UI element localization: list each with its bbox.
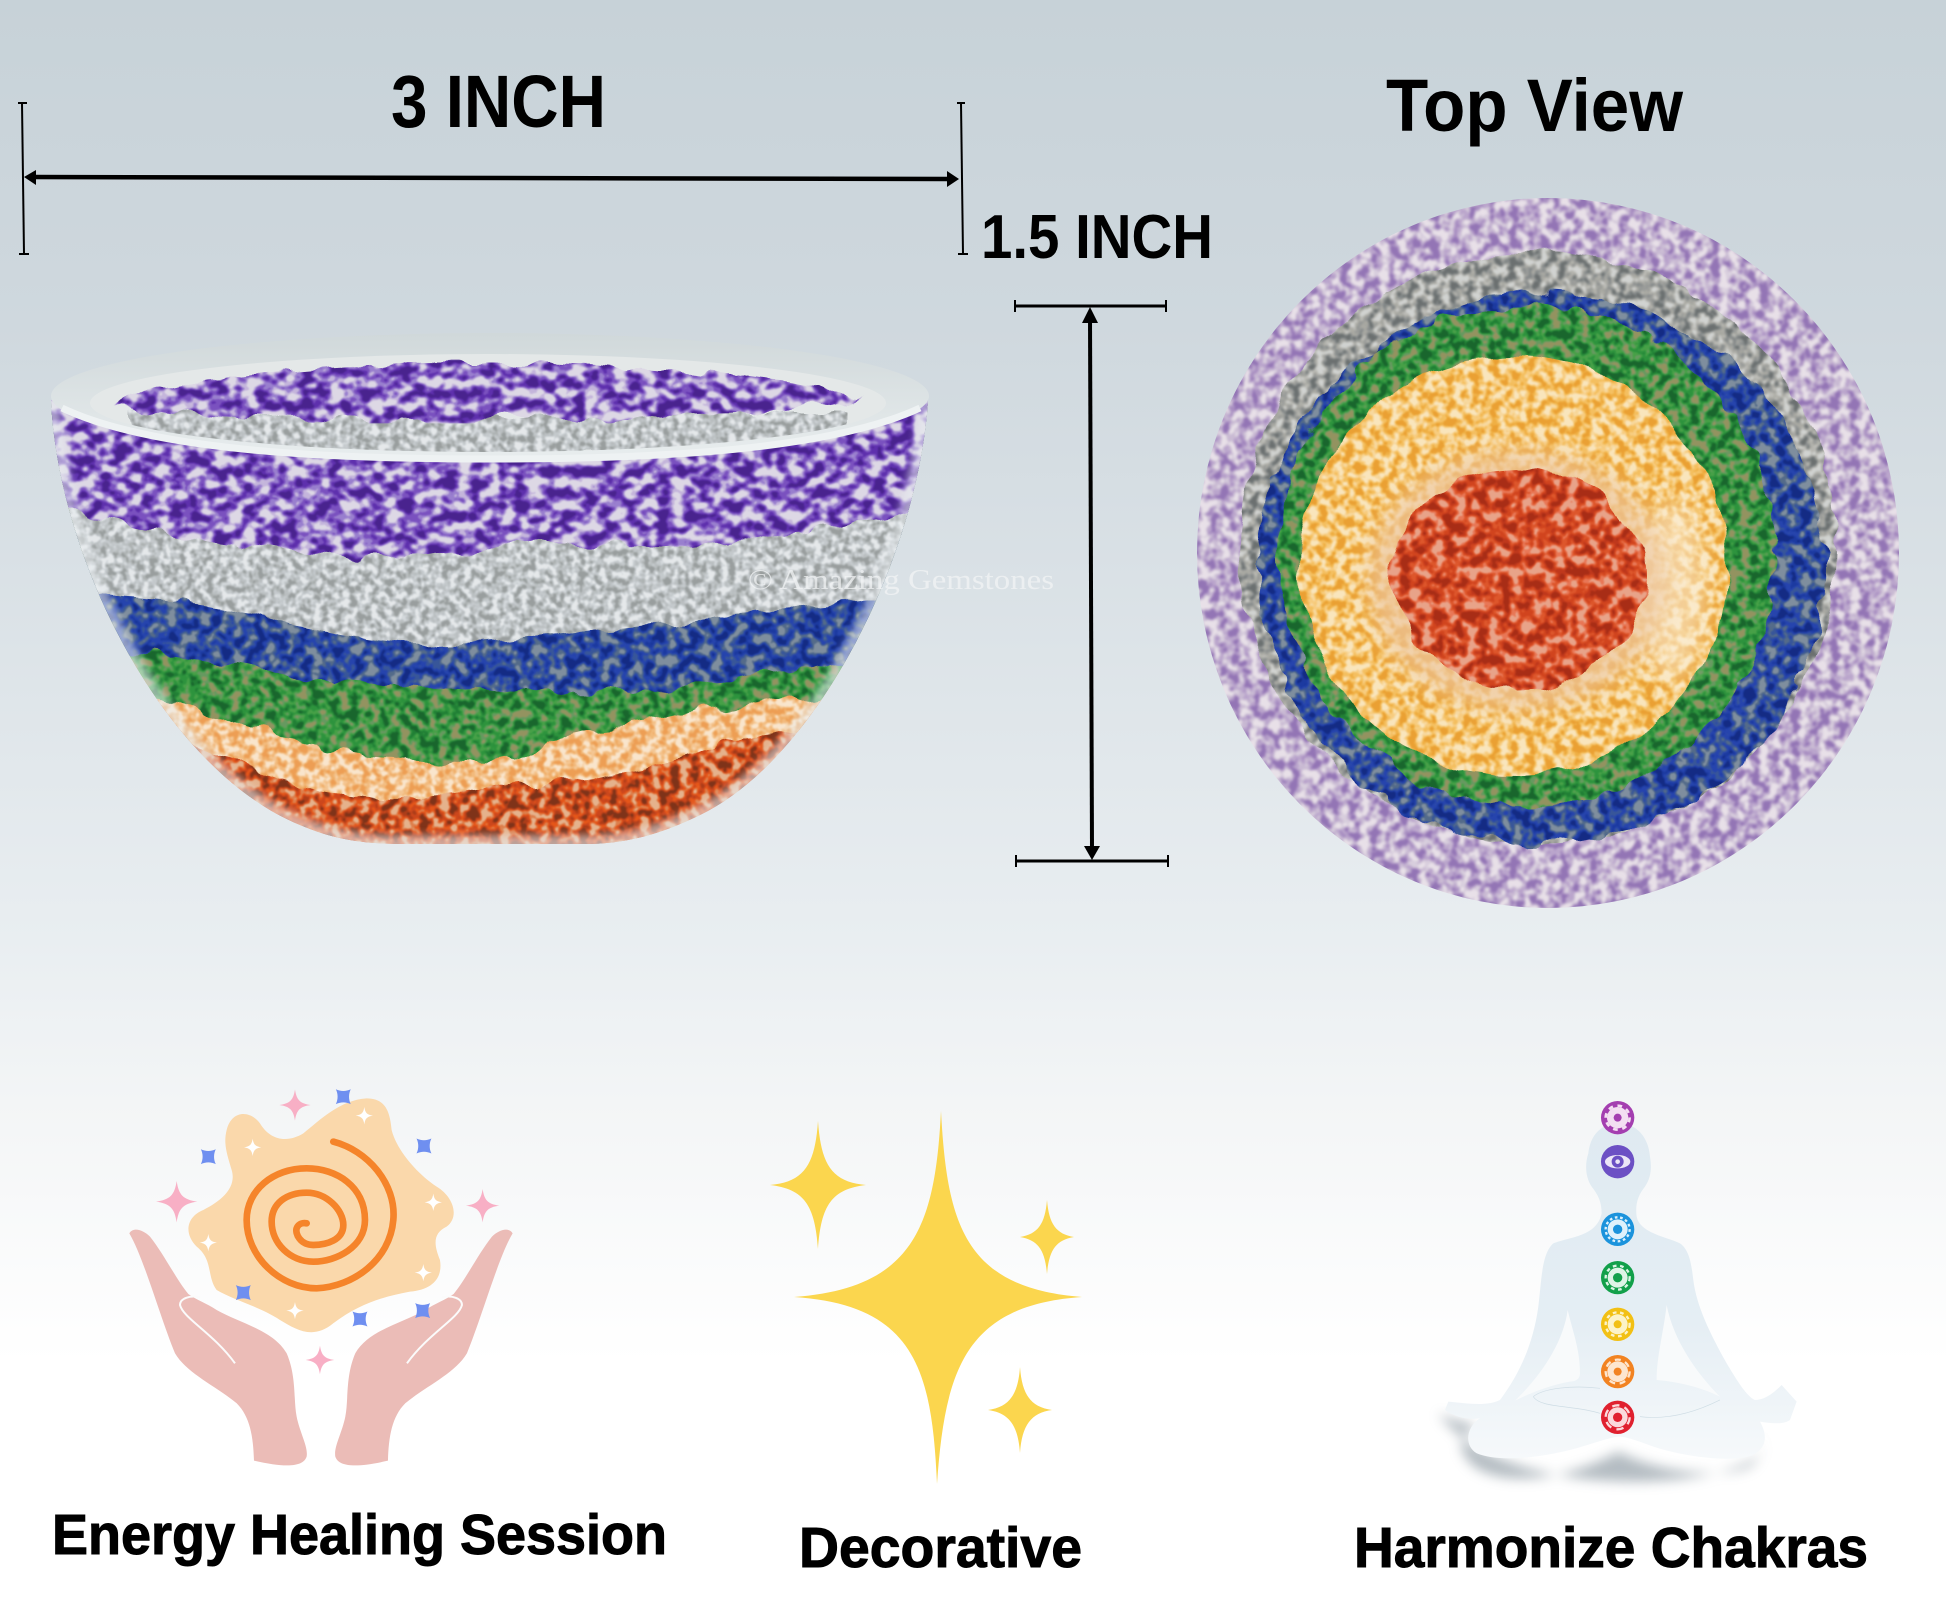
- small star bottom: [988, 1367, 1052, 1453]
- energy blob: [188, 1098, 454, 1332]
- white sparkles: [200, 1107, 442, 1319]
- band: green aventurine: [51, 404, 928, 766]
- label: Decorative: Decorative: [799, 1516, 1082, 1580]
- bowl: side view: [51, 354, 1053, 844]
- yellow ring: [1299, 356, 1727, 776]
- heading: Top View: Top View: [1386, 64, 1683, 147]
- bowl: top view: [1197, 198, 1899, 908]
- left arm gap: [1515, 1310, 1580, 1401]
- blue sparkles: [201, 1089, 431, 1326]
- band: amethyst: [51, 400, 928, 563]
- pale halo: [1368, 450, 1668, 710]
- heart chakra: [1601, 1261, 1634, 1294]
- icon: meditating figure with chakras: [1438, 1101, 1797, 1482]
- solar plexus chakra: [1601, 1308, 1634, 1341]
- figure shadow: [1438, 1413, 1762, 1482]
- lapis ring: [1259, 292, 1825, 844]
- crossed legs outline: [1533, 1387, 1720, 1417]
- right thumb crease: [407, 1297, 462, 1363]
- watermark: © Amazing Gemstones: [748, 564, 1054, 596]
- right arm gap: [1657, 1305, 1720, 1397]
- front rim edge: [62, 408, 920, 459]
- red jasper centre: [1393, 468, 1645, 688]
- glass edge highlight: [51, 400, 928, 844]
- interior amethyst: [110, 362, 860, 420]
- bowl rim: [51, 333, 929, 459]
- small star right: [1020, 1200, 1074, 1274]
- heading: 3 INCH: 3 INCH: [391, 60, 606, 143]
- width dimension arrow: [18, 103, 968, 254]
- band: grey quartz: [51, 400, 928, 648]
- heading: 1.5 INCH: 1.5 INCH: [981, 203, 1213, 272]
- bowl body with gemstone bands: [51, 400, 928, 844]
- label: Energy Healing Session: Energy Healing Session: [52, 1503, 667, 1567]
- band: lapis blue: [51, 402, 928, 697]
- root chakra: [1601, 1401, 1634, 1434]
- band: red jasper base: [158, 700, 822, 844]
- figure silhouette: [1445, 1123, 1797, 1459]
- left hand: [129, 1230, 307, 1465]
- icon: healing hands with energy swirl: [129, 1089, 513, 1465]
- rim ring: [1197, 198, 1899, 908]
- throat chakra: [1601, 1213, 1634, 1246]
- sacral chakra: [1601, 1355, 1634, 1388]
- crown chakra: [1601, 1101, 1634, 1134]
- icon: decorative sparkles: [770, 1111, 1082, 1484]
- band: orange carnelian: [51, 404, 928, 801]
- height dimension arrow: [1015, 300, 1168, 867]
- large star: [794, 1111, 1082, 1484]
- spiral: [247, 1142, 394, 1288]
- left thumb crease: [180, 1297, 235, 1363]
- small star left: [770, 1121, 866, 1249]
- inner wall: [1240, 252, 1836, 844]
- third eye chakra: [1601, 1145, 1634, 1178]
- pink sparkles: [156, 1089, 499, 1374]
- interior quartz: [130, 412, 850, 456]
- bowl interior: [96, 354, 880, 452]
- green ring: [1279, 306, 1775, 806]
- right hand: [335, 1230, 513, 1465]
- pale yellow patch right: [1638, 500, 1706, 680]
- label: Harmonize Chakras: Harmonize Chakras: [1354, 1516, 1868, 1580]
